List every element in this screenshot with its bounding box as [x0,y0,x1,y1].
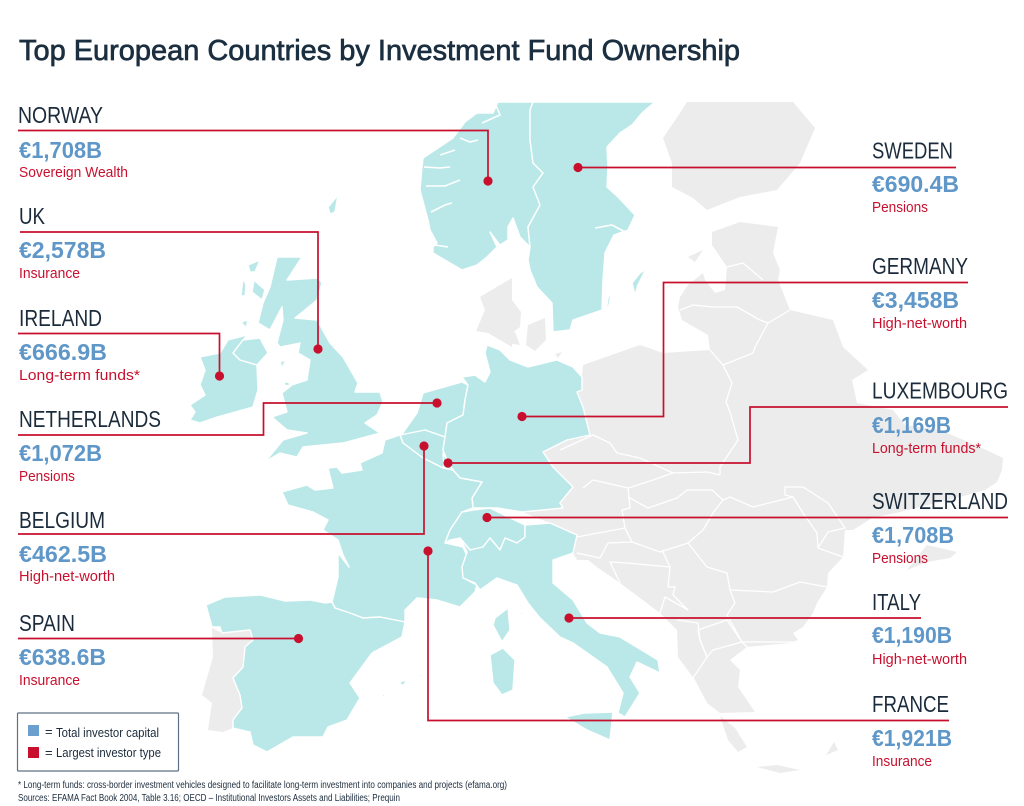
label: Sweden: SWEDEN [872,138,953,164]
Swedish islands [595,225,646,312]
label: Spain: SPAIN [19,610,75,636]
label: Ireland: Long-term funds* [19,367,140,384]
leader line: Switzerland [482,513,1008,522]
label: Italy [872,589,967,668]
label: Germany: GERMANY [872,253,968,279]
label: UK: Insurance [19,265,80,282]
label: Belgium: BELGIUM [19,507,105,533]
legend: Total investor capital [56,725,159,740]
Germany [443,345,590,512]
leader line: Netherlands [18,398,442,435]
footnote and sources: * Long-term funds: cross-border investment vehicles designed to facilitate long-term investment into companies and projects (efama.org) [18,780,507,791]
Luxembourg [443,453,453,470]
Greek peninsula and islands [688,250,838,773]
Ireland [190,335,268,423]
leader line: Belgium [18,441,429,534]
leader line: France [423,546,949,720]
Portugal [202,628,253,732]
non-highlighted countries: Finland [663,102,815,210]
Norway [420,102,543,270]
label: France: Insurance [872,753,932,770]
Norwegian fjords [424,103,500,247]
label: Italy: ITALY [872,589,921,615]
leader line: Norway [18,130,493,186]
label: Switzerland [872,488,1008,567]
label: UK [19,203,106,282]
label: UK: €2,578B [19,237,106,263]
label: Switzerland: €1,708B [872,522,954,548]
label: Belgium: €462.5B [19,541,107,567]
label: Luxembourg: Long-term funds* [872,440,981,457]
label: Norway: NORWAY [18,102,103,128]
label: Germany: €3,458B [872,287,959,313]
label: Ireland [19,305,140,384]
Spain [206,595,405,752]
leader line: Sweden [573,163,956,172]
label: Luxembourg [872,378,1008,457]
Sweden [528,102,655,332]
leader line: Germany [517,282,968,421]
label: Spain [19,610,106,689]
legend [18,713,178,771]
label: Ireland: IRELAND [19,305,102,331]
label: Switzerland: Pensions [872,550,928,567]
legend: = [45,724,53,739]
United Kingdom [241,195,383,462]
non-highlighted countries: eastern Europe [522,222,1003,713]
label: Sweden [872,138,959,216]
Crimea [907,545,957,570]
label: France: FRANCE [872,691,949,717]
label: Germany: High-net-worth [872,315,967,332]
Switzerland [445,508,525,550]
label: Norway: €1,708B [19,137,102,163]
Italy [460,523,660,717]
legend: Largest investor type [56,745,161,760]
label: Belgium: High-net-worth [19,568,115,585]
label: Italy: High-net-worth [872,651,967,668]
Belgium [400,430,447,468]
label: Sweden: Pensions [872,199,928,216]
leader line: Italy [564,613,921,623]
label: Norway: Sovereign Wealth [19,164,128,181]
Mediterranean islands: Sicily, Sardinia, Corsica, Balearics [382,608,613,740]
label: Netherlands [19,406,161,485]
label: Netherlands: €1,072B [19,440,102,466]
label: France: €1,921B [872,725,952,751]
France [282,435,482,622]
leader line: Ireland [18,334,224,381]
footnote and sources [18,780,507,804]
leader line: UK [20,232,323,354]
label: Netherlands: NETHERLANDS [19,406,161,432]
Netherlands [400,382,468,437]
label: Italy: €1,190B [872,622,952,648]
label: Germany [872,253,968,332]
map of Europe [190,102,1003,773]
title: Top European Countries by Investment Fund Ownership [19,35,740,67]
leader line: Spain [18,634,303,643]
label: Ireland: €666.9B [19,339,107,365]
label: Netherlands: Pensions [19,468,75,485]
legend: = [45,745,53,760]
label: Norway [18,102,128,181]
footnote and sources: Sources: EFAMA Fact Book 2004, Table 3.16; OECD – Institutional Investors Assets and Liabilities; Prequin [18,793,400,804]
label: Sweden: €690.4B [872,171,959,197]
label: Luxembourg: €1,169B [872,412,951,438]
label: Belgium [19,507,115,585]
label: France [872,691,952,770]
Denmark [476,278,562,358]
label: UK: UK [19,203,45,229]
label: Spain: Insurance [19,672,80,689]
label: Spain: €638.6B [19,644,106,670]
leader line: Luxembourg [443,407,1008,468]
